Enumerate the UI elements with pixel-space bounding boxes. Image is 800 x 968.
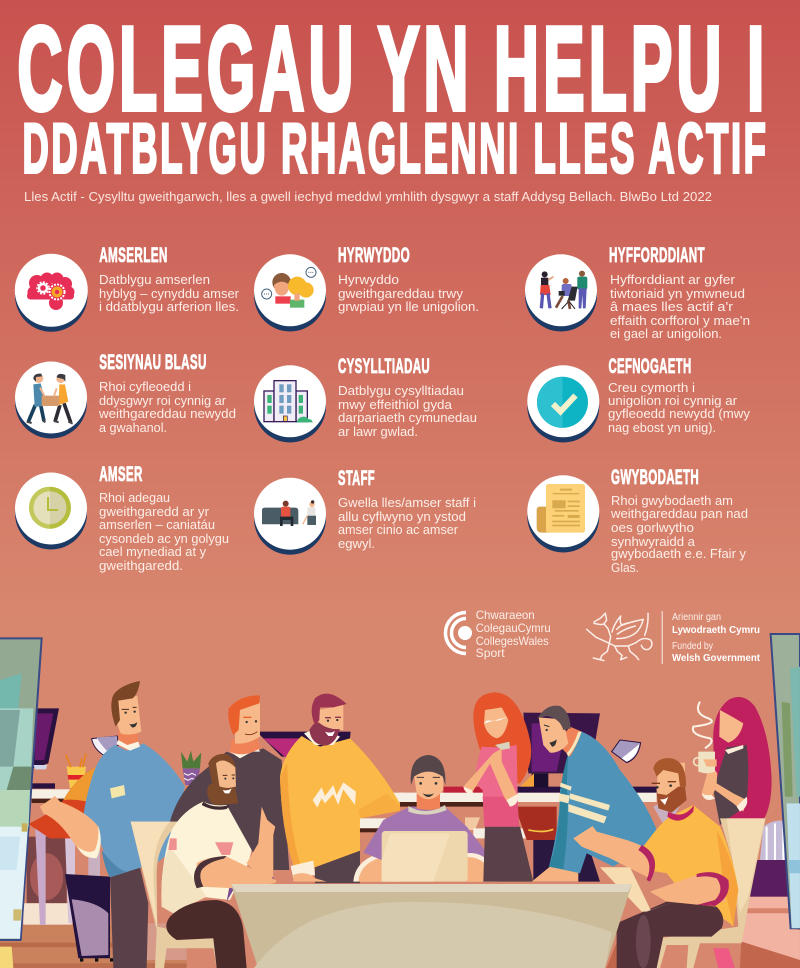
body text: allu cyflwyno yn ystod (338, 510, 466, 524)
panel: cysylltiadau (254, 354, 477, 442)
panel: amserlen (15, 243, 239, 332)
illustration: office team around a table (0, 634, 800, 968)
heading: STAFF (338, 466, 375, 490)
logo: Welsh Government dragon: Ariennir gan (672, 612, 721, 623)
heading: AMSER (99, 462, 143, 486)
icon: check mark (527, 365, 599, 442)
panel: hyfforddiant (525, 243, 750, 341)
man in dark sweater (170, 695, 289, 870)
panel: gwybodaeth (527, 465, 748, 575)
title (18, 2, 769, 188)
body text: amser cinio ac amser (338, 523, 458, 537)
body text: weithgareddau newydd (98, 407, 236, 421)
icon: team of three (525, 254, 597, 332)
icon: two people carrying a box (15, 362, 87, 438)
logo: Welsh Government dragon: Welsh Government (672, 653, 761, 664)
logo: Welsh Government dragon (587, 611, 761, 664)
right side of the office (353, 634, 800, 968)
woman with red hair (463, 692, 533, 882)
body text: Hyrwyddo (338, 273, 399, 287)
icon: cloud with gears (15, 254, 88, 332)
body text: Rhoi adegau (99, 491, 170, 505)
chair and man in cream t-shirt (131, 754, 277, 968)
icon: people on sofa (254, 478, 326, 555)
body text: oes gorlwytho (611, 521, 694, 535)
table (231, 884, 632, 968)
panel: sesiynau blasu (15, 350, 236, 438)
body text: â maes lles actif a'r (610, 300, 733, 314)
right window (771, 634, 800, 928)
left window (0, 638, 42, 940)
body text: gweithgaredd ar yr (99, 505, 209, 519)
body text: cysondeb ac yn golygu (99, 532, 229, 546)
woman with magenta hair and coffee (693, 697, 772, 825)
body text: Creu cymorth i (608, 381, 695, 395)
body text: Datblygu amserlen (99, 273, 210, 287)
panel: hyrwyddo (254, 243, 479, 332)
logo: ColegauCymru Sport (446, 608, 551, 660)
heading: AMSERLEN (99, 243, 168, 267)
heading: GWYBODAETH (611, 465, 699, 489)
body text: i ddatblygu arferion lles. (99, 300, 239, 314)
logo: ColegauCymru Sport: ColegauCymru (476, 621, 551, 635)
body text: unigolion roi cynnig ar (608, 394, 737, 408)
body text: Glas. (611, 561, 639, 575)
body text: hyblyg – cynyddu amser (99, 287, 239, 301)
body text: amserlen – caniatáu (99, 518, 215, 532)
left side of the office (0, 681, 403, 968)
man in yellow sweater (280, 694, 400, 883)
body text: grwpiau yn lle unigolion. (338, 300, 479, 314)
panel: amser (15, 462, 229, 573)
heading: SESIYNAU BLASU (99, 350, 207, 374)
body text (608, 381, 751, 435)
logo: Welsh Government dragon: Lywodraeth Cymru (672, 625, 760, 636)
body text: Datblygu cysylltiadau (338, 384, 464, 398)
logo: ColegauCymru Sport: CollegesWales (476, 634, 549, 648)
body text (338, 496, 476, 551)
body text: ei gael ar unigolion. (610, 327, 722, 341)
body text: gweithgareddau trwy (338, 287, 464, 301)
body text: Rhoi cyfleoedd i (99, 380, 191, 394)
body text: Gwella lles/amser staff i (338, 496, 476, 510)
body text: nag ebost yn unig). (608, 421, 716, 435)
logo: Welsh Government dragon: Funded by (672, 641, 713, 652)
body text: Rhoi gwybodaeth am (611, 494, 733, 508)
body text (610, 273, 750, 341)
man with laptop (353, 755, 498, 882)
body text: tiwtoriaid yn ymwneud (610, 287, 745, 301)
body text: a gwahanol. (99, 421, 167, 435)
body text: gweithgaredd. (99, 559, 183, 573)
body text: ar lawr gwlad. (338, 425, 418, 439)
body text: gwybodaeth e.e. Ffair y (611, 547, 747, 561)
heading: CYSYLLTIADAU (338, 354, 430, 378)
body text (99, 273, 239, 314)
man in blue sweater (40, 681, 185, 968)
body text (338, 273, 479, 314)
body text (99, 491, 229, 573)
body text (338, 384, 477, 439)
body text (98, 380, 236, 435)
body text: effaith corfforol y mae'n (610, 314, 750, 328)
body text: mwy effeithiol gyda (338, 398, 452, 412)
panel: staff (254, 466, 476, 555)
seated man with beard and chair (573, 758, 766, 968)
man leaning in blue sweater (532, 706, 657, 882)
body text: synhwyraidd a (611, 535, 695, 549)
body text: egwyl. (338, 537, 375, 551)
body text: darpariaeth cymunedau (338, 411, 477, 425)
body text: Hyfforddiant ar gyfer (610, 273, 735, 287)
panel: cefnogaeth (527, 354, 751, 442)
body text: weithgareddau pan nad (610, 507, 748, 521)
heading: CEFNOGAETH (608, 354, 692, 378)
logo: ColegauCymru Sport: Sport (476, 646, 505, 660)
body text (610, 494, 748, 575)
icon: clock (15, 472, 87, 550)
logo: ColegauCymru Sport: Chwaraeon (476, 608, 535, 622)
icon: newspaper (527, 475, 599, 552)
icon: college building (254, 365, 326, 442)
heading: HYRWYDDO (338, 243, 410, 267)
body text: cael mynediad at y (99, 545, 207, 559)
body text: ddysgwyr roi cynnig ar (99, 394, 226, 408)
subtitle: Lles Actif - Cysylltu gweithgarwch, lles a gwell iechyd meddwl ymhlith dysgwyr a staff Addysg Bellach. BlwBo Ltd 2022 (24, 189, 712, 204)
heading: HYFFORDDIANT (609, 243, 705, 267)
body text: gyfleoedd newydd (mwy (608, 407, 751, 421)
icon: two people talking (254, 254, 326, 332)
